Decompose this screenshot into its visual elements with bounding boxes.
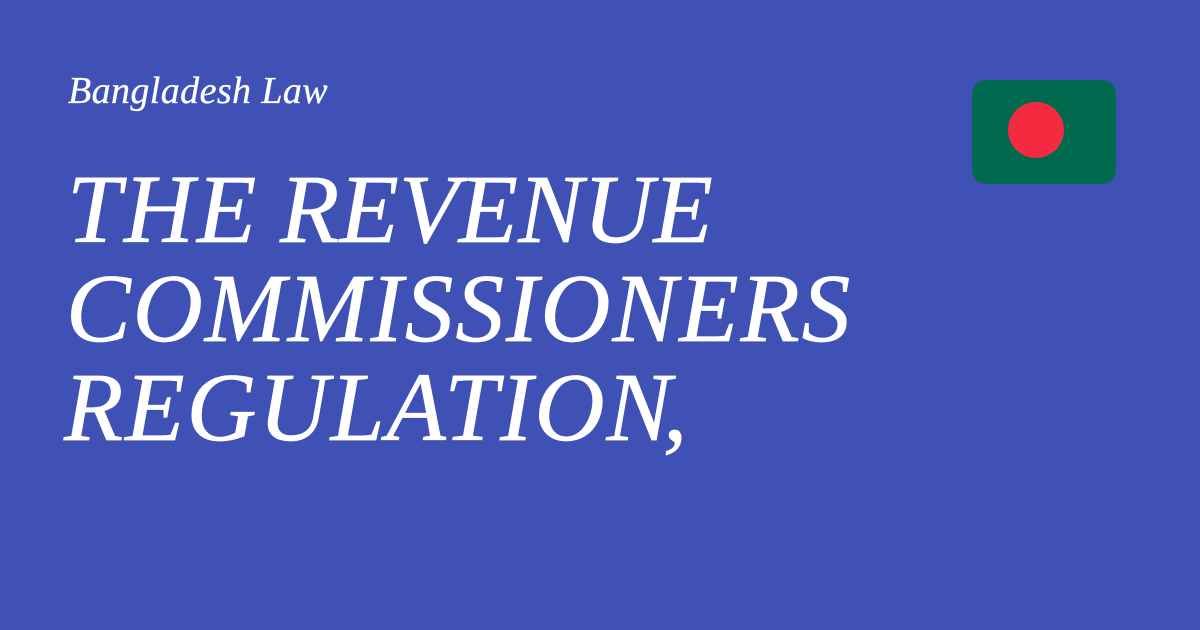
subtitle: Bangladesh Law: Bangladesh Law	[68, 70, 328, 112]
title: THE	[67, 156, 259, 263]
icon: Bangladesh flag	[972, 80, 1116, 184]
title: REVENUE	[280, 156, 713, 263]
title: ,	[663, 354, 687, 461]
title	[63, 156, 852, 461]
title: COMMISSIONERS	[66, 255, 852, 362]
title: REGULATION	[64, 354, 673, 461]
